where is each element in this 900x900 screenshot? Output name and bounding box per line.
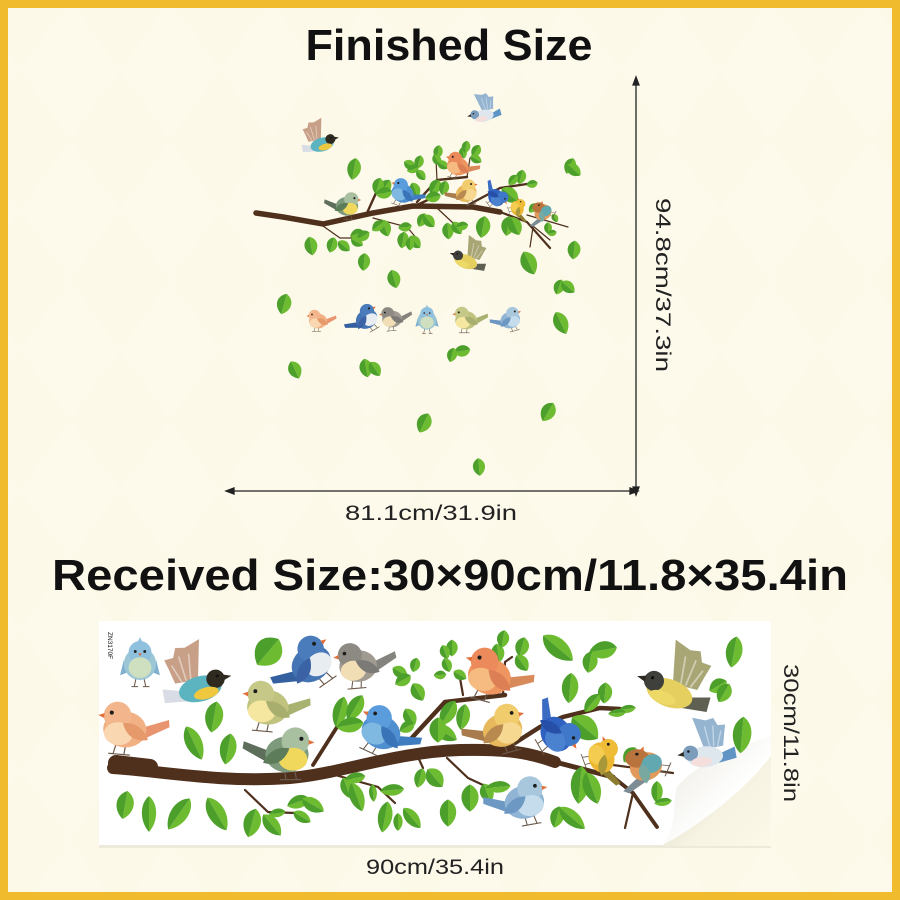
leaves: finished decal [274,140,584,476]
sheet background with peeled corner [99,621,771,848]
title: finished size: Finished Size [306,21,592,70]
birds: finished decal [296,90,558,342]
product code: ZN3170F [106,632,113,659]
panel: received decal sheet [95,621,771,848]
birds: received decal [95,628,737,832]
title: received size: Received Size:30×90cm/11.8×35.4in [52,551,848,600]
branch: received decal [113,657,673,828]
label: received width: 90cm/35.4in [366,855,504,879]
arrow: width dimension [226,488,638,494]
label: received height: 30cm/11.8in [779,664,803,802]
leaves: received decal [114,628,753,840]
branch: finished decal [256,158,568,248]
label: height: 94.8cm/37.3in [651,198,675,372]
arrow: height dimension [633,77,639,495]
label: width: 81.1cm/31.9in [345,501,517,525]
illustration: finished wall decal [256,90,584,476]
